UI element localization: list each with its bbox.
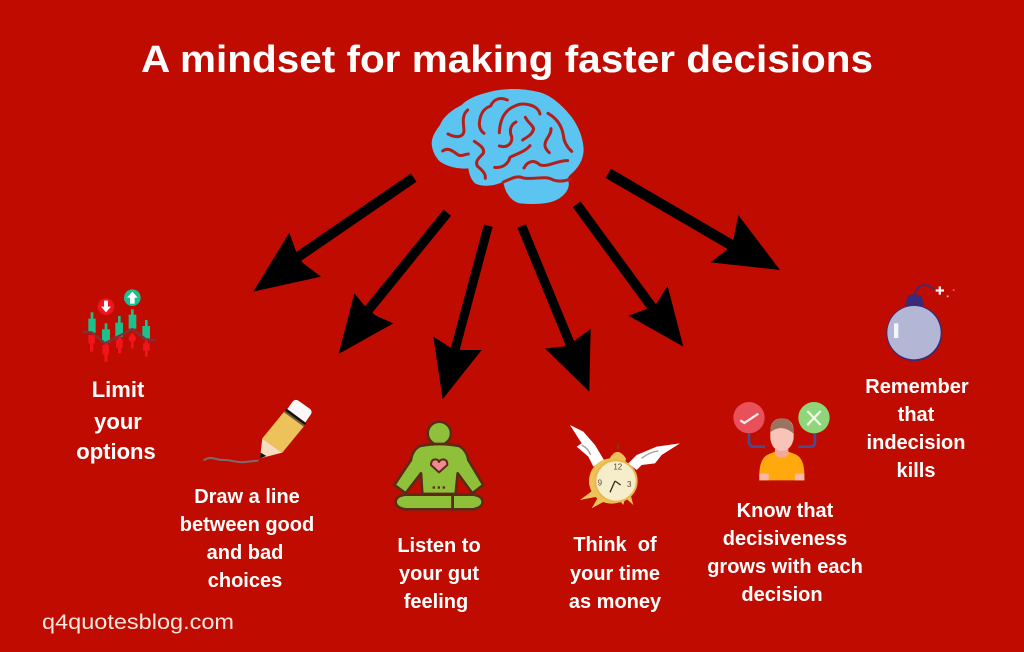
text: think of your time as money: Think of — [573, 534, 657, 556]
text: know that decisiveness grows: decisiveness — [723, 528, 847, 550]
text: draw a line — [180, 486, 314, 592]
icon: person with choices — [733, 402, 830, 480]
text: remember that indecision kills: kills — [897, 460, 935, 482]
arrow 2 — [339, 213, 447, 354]
icon: pencil — [204, 400, 312, 462]
website credit: q4quotesblog.com — [42, 610, 234, 634]
icon: meditating figure — [394, 422, 483, 509]
text: draw a line: between good — [180, 514, 314, 536]
icon: flying alarm clock — [570, 425, 680, 508]
text: know that decisiveness grows: decision — [741, 584, 823, 606]
text: draw a line: Draw a line — [194, 486, 300, 508]
text: know that decisiveness grows: Know that — [737, 500, 834, 522]
text: listen to your gut feeling: feeling — [404, 591, 468, 613]
icon: flying alarm clock: 3 — [627, 480, 632, 489]
text: think of your time as money: your time — [570, 563, 660, 585]
text: remember that indecision kills: indecision — [867, 432, 965, 454]
text: think of your time as money: as money — [569, 591, 662, 613]
text: limit your options — [76, 377, 156, 464]
text: limit your options: Limit — [92, 377, 145, 402]
text: limit your options: options — [76, 439, 156, 464]
icon: flying alarm clock: 12 — [613, 462, 623, 471]
arrow 1 — [253, 178, 414, 292]
title: A mindset for making faster decisions — [141, 39, 873, 81]
text: limit your options: your — [94, 409, 142, 434]
icon: brain — [432, 89, 584, 204]
arrow 5 — [577, 204, 683, 347]
text: listen to your gut feeling: your gut — [399, 563, 479, 585]
text: know that decisiveness grows — [707, 500, 863, 606]
text: think of your time as money — [569, 534, 662, 613]
text: know that decisiveness grows: grows with each — [707, 556, 863, 578]
arrow 3 — [433, 226, 488, 399]
text: draw a line: and bad — [207, 542, 283, 564]
text: draw a line: choices — [208, 570, 282, 592]
text: listen to your gut feeling — [397, 535, 481, 613]
text: listen to your gut feeling: Listen to — [397, 535, 481, 557]
text: remember that indecision kills: that — [898, 404, 935, 426]
arrow 6 — [608, 173, 780, 270]
text: remember that indecision kills — [865, 376, 969, 482]
arrow 4 — [522, 226, 591, 392]
icon: bomb — [886, 285, 955, 361]
icon: candlestick chart — [83, 289, 156, 362]
icon: flying alarm clock: 9 — [598, 479, 603, 488]
text: remember that indecision kills: Remember — [865, 376, 969, 398]
